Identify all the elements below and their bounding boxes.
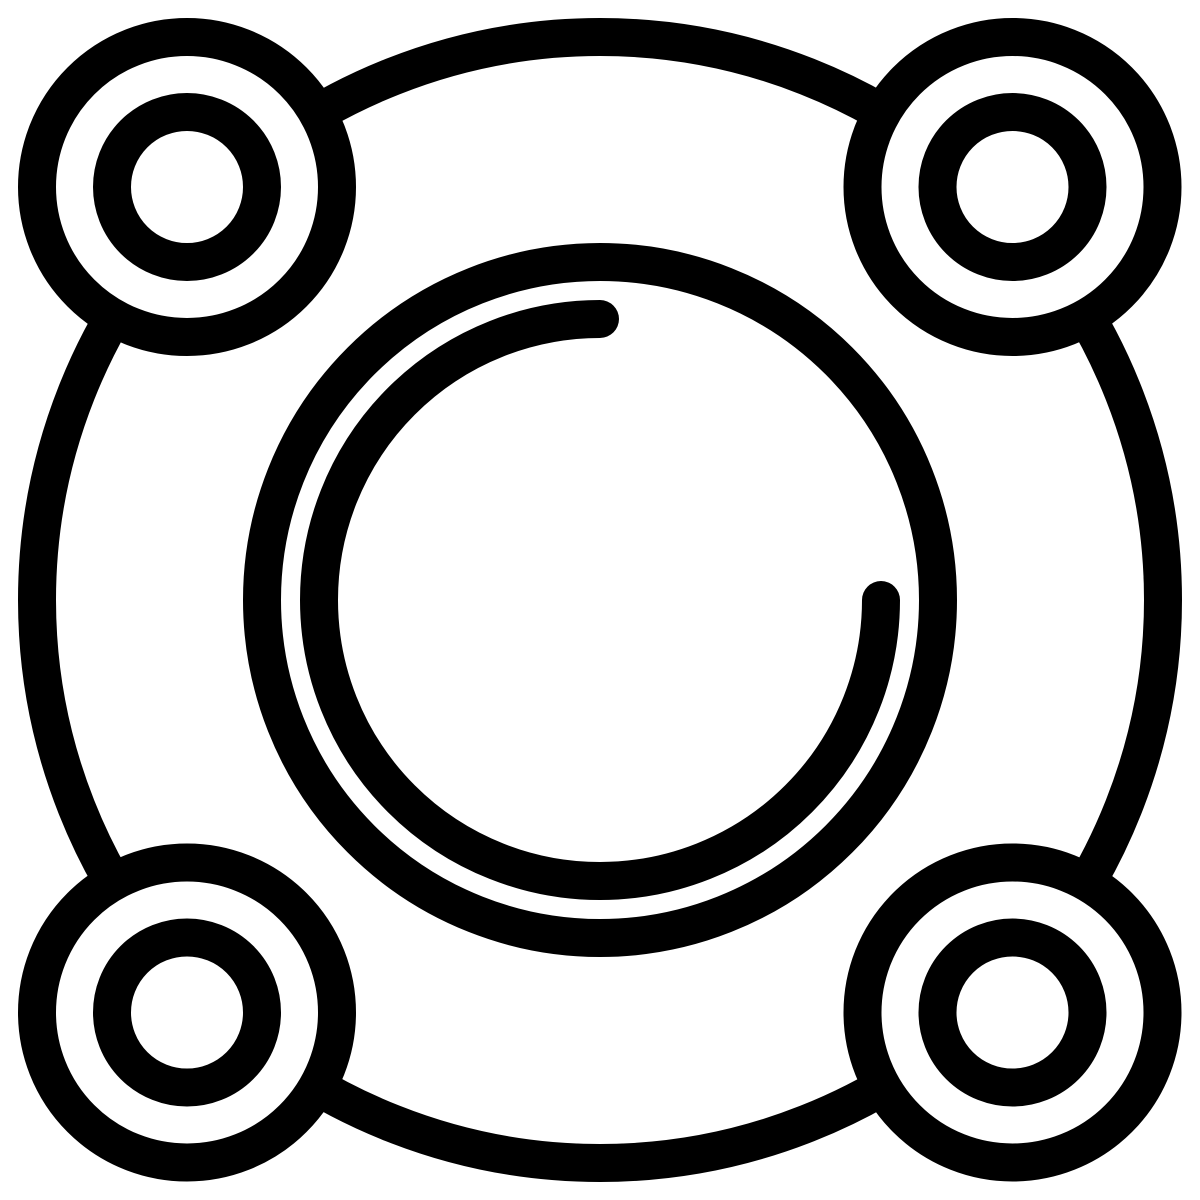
bottom-left corner mount <box>37 862 337 1162</box>
bottom-right corner mount <box>862 862 1162 1162</box>
top-right corner mount <box>862 37 1162 337</box>
central three-quarter arc <box>319 319 881 881</box>
central large circle <box>262 262 938 938</box>
top-left corner mount <box>37 37 337 337</box>
